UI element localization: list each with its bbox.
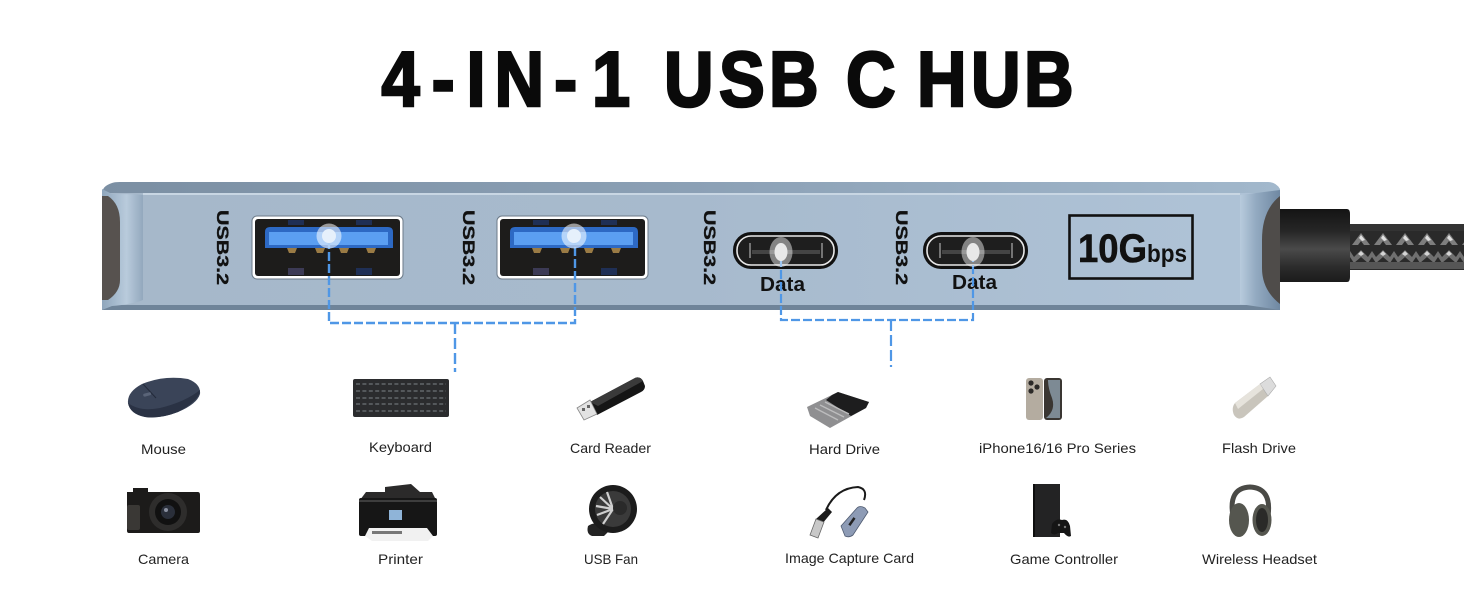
label: Data 2: Data (952, 272, 998, 294)
hub bottom bevel (102, 305, 1280, 310)
right end cap (1240, 190, 1280, 310)
icon: mouse (128, 378, 200, 417)
icon: flash drive (1233, 384, 1268, 419)
label: Camera: Camera (138, 551, 189, 567)
connector: USB-C ports dashed line (770, 237, 984, 367)
label: Wireless Headset: Wireless Headset (1202, 551, 1317, 567)
label: Card Reader: Card Reader (570, 440, 651, 456)
badge: 10Gbps: bps (1147, 240, 1187, 268)
cable plug (1278, 209, 1350, 282)
device: keyboard (353, 379, 449, 455)
label: Mouse: Mouse (141, 441, 186, 457)
device: camera (127, 488, 200, 567)
hub body (102, 182, 1280, 310)
label: USB3.2 port 4: USB3.2 (892, 210, 911, 285)
device: headset (1202, 487, 1317, 567)
USB-A port 1 (252, 216, 403, 279)
label: USB3.2 port 2: USB3.2 (459, 210, 478, 285)
label: Printer: Printer (378, 551, 423, 567)
braided cable (1350, 224, 1464, 270)
label: USB3.2 port 1: USB3.2 (213, 210, 232, 285)
icon: USB fan (588, 523, 612, 536)
icon: printer (360, 484, 436, 500)
icon: game console (1033, 484, 1060, 537)
left opening (102, 196, 120, 300)
device: phone (979, 378, 1136, 456)
icon: headset (1232, 487, 1269, 516)
icon: hard drive (807, 392, 869, 428)
device: flash drive (1222, 377, 1296, 456)
device: game console (1010, 484, 1118, 567)
USB-C port 2 (923, 232, 1028, 269)
icon: camera (127, 488, 200, 533)
label: USB3.2 port 3: USB3.2 (700, 210, 719, 285)
device: hard drive (807, 392, 880, 457)
title: 4-IN-1 USB C HUB (382, 35, 1074, 123)
label: Flash Drive: Flash Drive (1222, 440, 1296, 456)
cable (1278, 209, 1464, 282)
icon: card reader (590, 377, 645, 415)
label: Game Controller: Game Controller (1010, 551, 1118, 567)
hub front face (102, 193, 1280, 306)
label: USB Fan: USB Fan (584, 551, 638, 567)
device: USB fan (584, 485, 638, 567)
right opening (1262, 196, 1280, 304)
badge: 10Gbps: 10G (1078, 227, 1147, 271)
label: Data 1: Data (760, 274, 806, 296)
label: Image Capture Card: Image Capture Card (785, 550, 914, 566)
icon: capture card (826, 487, 865, 510)
device: printer (359, 484, 437, 567)
left end cap (102, 189, 143, 310)
connector: USB-A ports dashed line (316, 224, 586, 372)
USB-C port 1 (733, 232, 838, 269)
label: Keyboard: Keyboard (369, 439, 432, 455)
label: iPhone16/16 Pro Series: iPhone16/16 Pro Series (979, 440, 1136, 456)
device: card reader (570, 377, 651, 456)
hub top bevel (102, 182, 1280, 194)
label: Hard Drive: Hard Drive (809, 441, 880, 457)
icon: iPhone (1026, 378, 1043, 420)
device: capture card (785, 487, 914, 566)
USB-A port 2 (497, 216, 648, 279)
device: mouse (128, 378, 200, 457)
badge: 10Gbps (1070, 216, 1192, 278)
icon: keyboard (353, 379, 449, 417)
